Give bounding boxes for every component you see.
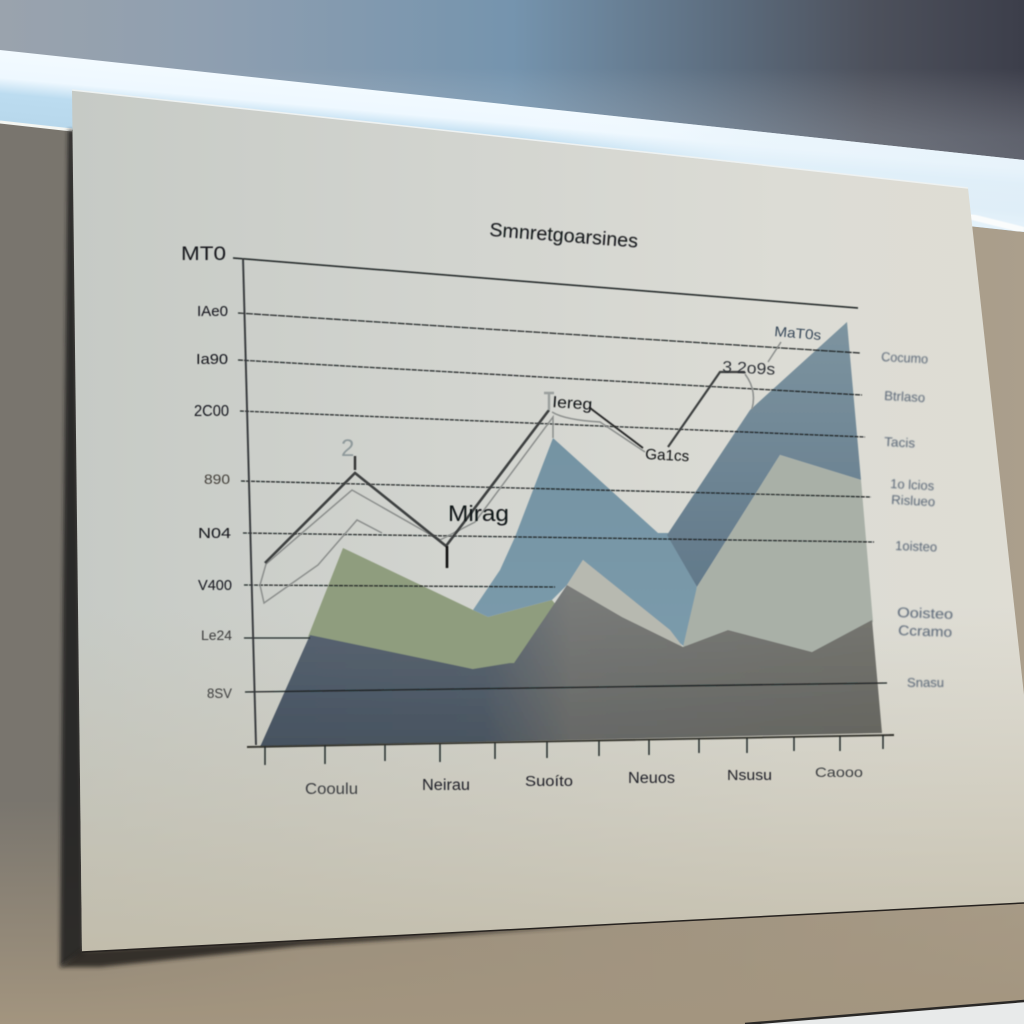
y-axis labels: IAe0 xyxy=(197,303,228,320)
right-side legend labels: Rislueo xyxy=(891,492,936,509)
y-axis labels xyxy=(181,244,233,701)
y-axis labels: 8SV xyxy=(207,685,233,701)
chart annotations: Mirag xyxy=(448,501,509,526)
y-axis labels: MT0 xyxy=(181,244,226,265)
y-axis labels: 890 xyxy=(204,471,230,487)
chart annotations: Ga1cs xyxy=(645,446,690,465)
bottom right wall edge xyxy=(745,1001,1024,1024)
chart annotations: Iereg xyxy=(552,394,593,414)
x-axis labels: Nsusu xyxy=(727,767,772,784)
chart annotations: 2 xyxy=(341,435,354,462)
y-axis labels: N04 xyxy=(198,525,231,542)
area: green series xyxy=(308,548,560,670)
chart annotations: 3 2o9s xyxy=(722,359,776,379)
area: pale grey wedge xyxy=(567,560,683,647)
background: dark upper wall xyxy=(0,0,1024,240)
right-side legend labels: 1o lcios xyxy=(890,476,935,493)
x-axis labels: Suoíto xyxy=(525,773,573,790)
right-side legend labels: Ooisteo xyxy=(897,604,954,622)
chart annotations: MaT0s xyxy=(774,323,822,343)
right-side legend labels: Snasu xyxy=(907,675,944,690)
area: slate and grey base series xyxy=(260,585,882,747)
y-axis labels: V400 xyxy=(198,577,232,594)
right-side legend labels: Cocumo xyxy=(881,349,929,366)
panel: paper sheet xyxy=(72,90,1024,952)
x-axis labels: Neirau xyxy=(422,777,470,794)
chart annotations xyxy=(341,323,822,526)
right-side legend labels: 1oisteo xyxy=(895,538,937,554)
right-side legend labels: Tacis xyxy=(884,434,916,451)
x-axis labels: Cooulu xyxy=(305,781,358,798)
area: light blue series xyxy=(473,438,697,648)
y-axis labels: Le24 xyxy=(201,627,232,643)
paper shadow xyxy=(60,130,620,967)
x-axis labels: Caooo xyxy=(815,764,863,780)
x-axis labels xyxy=(305,764,863,798)
right-side legend labels: Btrlaso xyxy=(884,388,926,405)
area: teal series xyxy=(667,322,861,587)
glowing light strip xyxy=(0,50,1024,232)
y-axis labels: Ia90 xyxy=(196,351,228,368)
right-side legend labels: Ccramo xyxy=(898,622,953,640)
axes and gridlines xyxy=(233,258,894,765)
right-side legend labels xyxy=(881,349,954,690)
line series: thin secondary lines xyxy=(260,342,781,603)
x-axis labels: Neuos xyxy=(628,770,675,787)
area chart xyxy=(260,322,882,747)
line series: main dark line xyxy=(265,372,745,568)
area: pale sage series xyxy=(683,455,873,652)
chart title: Smnretgoarsines xyxy=(489,220,639,253)
y-axis labels: 2C00 xyxy=(194,403,229,420)
